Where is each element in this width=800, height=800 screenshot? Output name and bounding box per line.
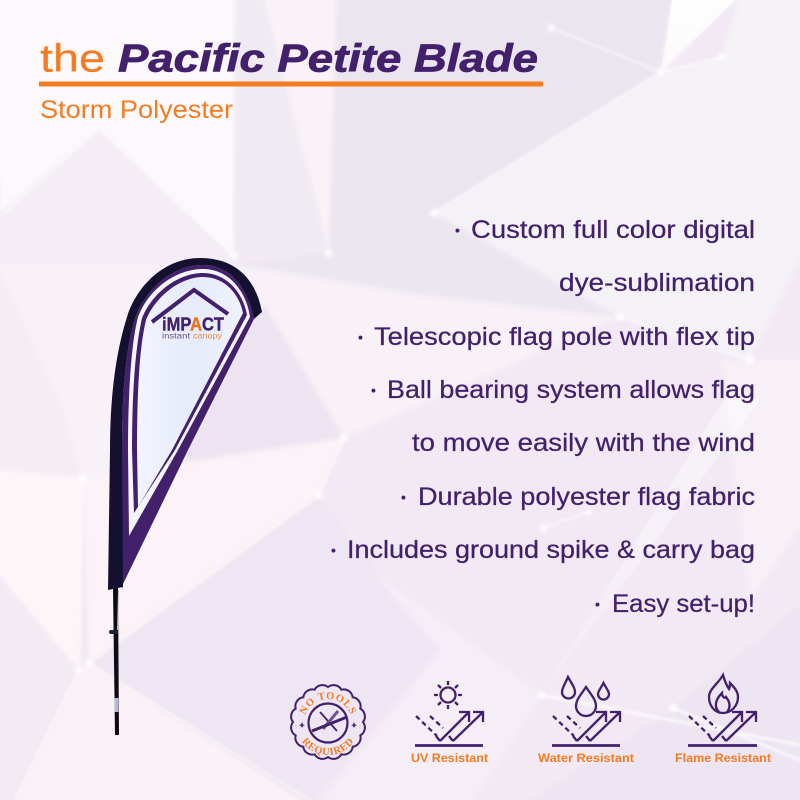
feature list: Easy set-up! (612, 590, 755, 618)
flag pole (109, 588, 119, 735)
icon: UV resistant (415, 681, 483, 746)
feature list: Includes ground spike & carry bag (347, 536, 755, 564)
icon: no tools required badge: NO TOOLS (299, 692, 356, 715)
label: UV resistant: UV Resistant (411, 753, 488, 765)
subtitle: Storm Polyester (40, 96, 233, 124)
label: flame resistant: Flame Resistant (675, 753, 771, 765)
icon: water resistant (552, 677, 620, 746)
icon: flame resistant (688, 675, 757, 746)
feature list: Durable polyester flag fabric (418, 483, 755, 511)
feature list: • (595, 596, 600, 612)
logo: impact instant canopy (152, 290, 228, 340)
flag purple body (122, 265, 254, 590)
feature list: • (455, 222, 460, 238)
label: water resistant: Water Resistant (538, 753, 634, 765)
feature list: • (358, 329, 363, 345)
title: Pacific Petite Blade (118, 38, 538, 80)
feature list: dye-sublimation (559, 269, 755, 297)
feature list: • (401, 489, 406, 505)
flag white stripe (128, 269, 250, 536)
flag inner purple stripe (132, 273, 247, 513)
feature list: Custom full color digital (471, 216, 755, 244)
flag product photo (108, 258, 262, 735)
logo: impact instant canopy: canopy (193, 332, 222, 340)
feature list: Telescopic flag pole with flex tip (374, 323, 755, 351)
title: the (40, 38, 105, 80)
feature list: • (331, 542, 336, 558)
feature list: to move easily with the wind (412, 429, 755, 457)
feature list: Ball bearing system allows flag (387, 376, 755, 404)
feature list (331, 216, 755, 618)
title underline (39, 82, 543, 86)
icon: no tools required badge (290, 684, 366, 760)
feature list: • (371, 382, 376, 398)
logo: impact instant canopy: instant (162, 332, 191, 340)
logo: impact instant canopy: iMPACT (162, 314, 224, 334)
flag panel (137, 277, 243, 507)
flag dark sleeve (108, 258, 262, 590)
icon: no tools required badge: REQUIRED (302, 737, 352, 756)
